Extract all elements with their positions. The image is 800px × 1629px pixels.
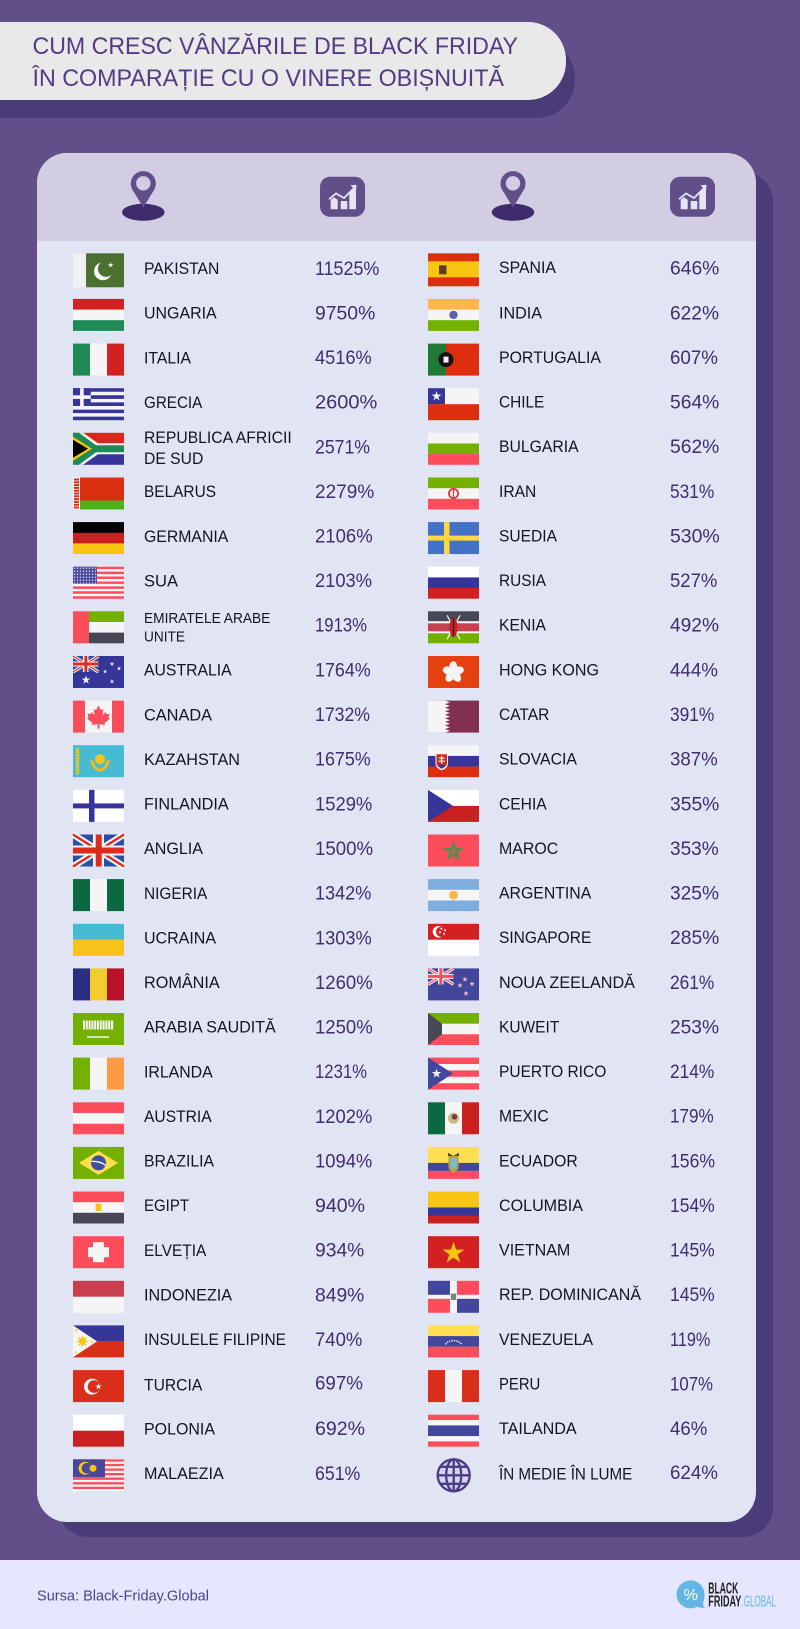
icon: flag Portugal — [428, 344, 479, 376]
icon: flag Morocco — [428, 834, 479, 866]
row: Turcia: TURCIA — [144, 1377, 202, 1395]
row: Slovacia: 387% — [670, 749, 718, 771]
icon: flag Thailand — [428, 1415, 479, 1447]
row: Suedia: 530% — [670, 525, 720, 547]
icon: flag Italy — [73, 344, 124, 376]
row: Bulgaria: 562% — [670, 436, 719, 458]
row: Polonia — [73, 1415, 365, 1447]
row: Kuweit: 253% — [670, 1016, 719, 1038]
icon: flag Mexico — [428, 1102, 479, 1134]
row: Brazilia: 1094% — [315, 1150, 372, 1172]
row: Turcia — [73, 1370, 363, 1402]
row: Egipt — [73, 1192, 365, 1224]
row: Irlanda: 1231% — [315, 1061, 367, 1083]
icon: flag Egypt — [73, 1192, 124, 1224]
icon: flag Romania — [73, 968, 124, 1000]
title banner: CUM CRESC VÂNZĂRILE DE BLACK FRIDAY — [32, 33, 518, 60]
row: Iran: IRAN — [499, 483, 536, 501]
row: India: INDIA — [499, 304, 542, 322]
row: Egipt: 940% — [315, 1195, 365, 1217]
row: Turcia: 697% — [315, 1372, 363, 1394]
row: Australia: 1764% — [315, 660, 371, 682]
row: Polonia: POLONIA — [144, 1420, 215, 1438]
row: Egipt: EGIPT — [144, 1197, 189, 1215]
row: Emiratele Arabe Unite: UNITE — [144, 629, 185, 645]
icon: flag Belarus — [73, 478, 124, 510]
row: Kenia: KENIA — [499, 617, 546, 635]
row: Emiratele Arabe Unite — [73, 611, 367, 646]
row: Columbia: 154% — [670, 1195, 715, 1217]
row: Bulgaria: BULGARIA — [499, 438, 579, 456]
row: Chile — [428, 388, 719, 420]
row: Malaezia — [73, 1459, 360, 1491]
row: Austria: AUSTRIA — [144, 1108, 212, 1126]
row: SUA: 2103% — [315, 570, 372, 592]
row: Puerto Rico: 214% — [670, 1061, 714, 1083]
icon: flag Slovakia — [428, 745, 479, 777]
row: Brazilia: BRAZILIA — [144, 1153, 214, 1171]
row: Nigeria: NIGERIA — [144, 885, 207, 903]
icon: flag South Africa — [73, 433, 124, 465]
icon: flag Austria — [73, 1102, 124, 1134]
row: Grecia: 2600% — [315, 392, 377, 414]
row: Grecia: GRECIA — [144, 394, 202, 412]
row: Indonezia: 849% — [315, 1284, 364, 1306]
row: Kuweit — [428, 1013, 719, 1045]
row: Iran — [428, 478, 714, 510]
row: Ecuador: 156% — [670, 1150, 715, 1172]
row: Insulele Filipine — [73, 1325, 362, 1357]
icon: globe — [438, 1459, 470, 1491]
row: Finlandia — [73, 790, 372, 822]
icon: flag Germany — [73, 522, 124, 554]
row: Noua Zeelandă: NOUA ZEELANDĂ — [499, 973, 635, 992]
row: Maroc: MAROC — [499, 840, 559, 858]
row: Ecuador: ECUADOR — [499, 1152, 578, 1170]
row: Germania: GERMANIA — [144, 528, 228, 546]
icon: location pin right — [492, 171, 534, 221]
icon: location pin left — [122, 171, 165, 221]
row: Republica Africii de Sud: DE SUD — [144, 450, 203, 468]
row: Kazahstan — [73, 745, 371, 777]
row: Rusia: 527% — [670, 570, 717, 592]
row: Cehia: 355% — [670, 793, 719, 815]
icon: flag Canada — [73, 701, 124, 733]
row: Suedia: SUEDIA — [499, 527, 557, 545]
row: Portugalia: 607% — [670, 347, 718, 369]
row: Argentina: ARGENTINA — [499, 884, 591, 902]
row: Rep. Dominicană — [428, 1281, 715, 1313]
row: Spania — [428, 253, 719, 286]
source text: Sursa: Black-Friday.Global — [37, 1588, 209, 1605]
icon: flag Hungary — [73, 299, 124, 331]
row: Mexic: 179% — [670, 1106, 714, 1128]
row: Vietnam — [428, 1236, 715, 1268]
row: Rusia — [428, 567, 717, 599]
row: Noua Zeelandă — [428, 968, 714, 1000]
row: Irlanda — [73, 1058, 367, 1090]
row: În medie în lume: ÎN MEDIE ÎN LUME — [498, 1465, 632, 1484]
icon: flag Ukraine — [73, 924, 124, 956]
icon: flag Brazil — [73, 1147, 124, 1179]
icon: flag Peru — [428, 1370, 479, 1402]
row: Canada — [73, 701, 370, 733]
row: Canada: 1732% — [315, 704, 370, 726]
row: Nigeria — [73, 879, 371, 911]
row: Bulgaria — [428, 433, 719, 465]
row: Hong Kong: HONG KONG — [499, 661, 599, 679]
row: Puerto Rico: PUERTO RICO — [499, 1063, 606, 1081]
row: Italia: ITALIA — [144, 349, 191, 367]
row: Tailanda: 46% — [670, 1418, 707, 1440]
icon: flag Australia — [73, 656, 124, 688]
row: Venezuela: 119% — [670, 1329, 710, 1351]
row: Indonezia — [73, 1281, 364, 1313]
row: Malaezia: 651% — [315, 1463, 360, 1485]
row: Austria: 1202% — [315, 1106, 372, 1128]
icon: flag Kazakhstan — [73, 745, 124, 777]
row: Vietnam: VIETNAM — [499, 1242, 570, 1260]
row: România: ROMÂNIA — [144, 973, 220, 992]
row: Belarus: 2279% — [315, 481, 374, 503]
row: Australia — [73, 656, 371, 688]
row: Arabia Saudită — [73, 1013, 373, 1045]
row: Slovacia — [428, 745, 718, 777]
row: Belarus — [73, 478, 374, 510]
icon: flag Hong Kong — [428, 656, 479, 688]
row: Republica Africii de Sud — [73, 429, 370, 468]
icon: flag Venezuela — [428, 1325, 479, 1357]
icon: flag Sweden — [428, 522, 479, 554]
row: Anglia — [73, 834, 373, 866]
row: Singapore: SINGAPORE — [499, 929, 591, 947]
row: Venezuela: VENEZUELA — [499, 1331, 593, 1349]
row: Insulele Filipine: 740% — [315, 1329, 362, 1351]
row: Ecuador — [428, 1147, 715, 1179]
row: Cehia: CEHIA — [499, 795, 547, 813]
row: Chile: CHILE — [499, 394, 544, 412]
icon: growth chart left — [320, 177, 365, 217]
footer — [0, 1560, 800, 1629]
row: Noua Zeelandă: 261% — [670, 972, 714, 994]
icon: flag Indonesia — [73, 1281, 124, 1313]
icon: flag Puerto Rico — [428, 1058, 479, 1090]
row: Pakistan — [73, 253, 379, 287]
row: SUA: SUA — [144, 572, 178, 590]
icon: flag Argentina — [428, 879, 479, 911]
row: Spania: 646% — [670, 257, 719, 279]
icon: flag Kuwait — [428, 1013, 479, 1045]
row: Elveția: 934% — [315, 1240, 364, 1262]
row: Kazahstan: KAZAHSTAN — [144, 751, 240, 769]
row: Grecia — [73, 388, 377, 420]
row: Venezuela — [428, 1325, 710, 1357]
row: România — [73, 968, 373, 1000]
icon: flag Finland — [73, 790, 124, 822]
icon: flag Philippines — [73, 1325, 124, 1357]
icon: flag Saudi Arabia — [73, 1013, 124, 1045]
row: Kazahstan: 1675% — [315, 749, 371, 771]
panel: country table — [37, 153, 773, 1537]
row: Malaezia: MALAEZIA — [144, 1465, 224, 1483]
icon: flag Dominican Republic — [428, 1281, 479, 1313]
row: Nigeria: 1342% — [315, 883, 371, 905]
icon: flag Poland — [73, 1415, 124, 1447]
row: Rep. Dominicană: 145% — [670, 1284, 715, 1306]
row: SUA — [73, 567, 372, 599]
row: Tailanda: TAILANDA — [499, 1420, 577, 1438]
row: Ungaria — [73, 299, 375, 331]
row: Chile: 564% — [670, 392, 719, 414]
row: Peru — [428, 1370, 713, 1402]
row: Kenia: 492% — [670, 615, 719, 637]
icon: flag Russia — [428, 567, 479, 599]
row: Argentina — [428, 879, 719, 911]
row: Elveția: ELVEȚIA — [144, 1242, 206, 1260]
row: Germania — [73, 522, 373, 554]
row: Italia: 4516% — [315, 347, 372, 369]
icon: flag New Zealand — [428, 968, 479, 1000]
row: Puerto Rico — [428, 1058, 714, 1090]
row: Insulele Filipine: INSULELE FILIPINE — [144, 1331, 286, 1349]
icon: flag Colombia — [428, 1192, 479, 1224]
icon: flag India — [428, 299, 479, 331]
icon: flag Iran — [428, 478, 479, 510]
title banner: ÎN COMPARAȚIE CU O VINERE OBIȘNUITĂ — [32, 65, 504, 92]
icon: flag Kenya — [428, 611, 479, 643]
row: Portugalia — [428, 344, 718, 376]
row: Brazilia — [73, 1147, 372, 1179]
row: Kenia — [428, 611, 719, 643]
row: Australia: AUSTRALIA — [144, 662, 232, 680]
row: Finlandia: 1529% — [315, 793, 372, 815]
row: Belarus: BELARUS — [144, 483, 216, 501]
row: Arabia Saudită: ARABIA SAUDITĂ — [144, 1018, 276, 1037]
row: Anglia: ANGLIA — [144, 840, 203, 858]
row: Catar: 391% — [670, 704, 714, 726]
icon: flag Turkey — [73, 1370, 124, 1402]
icon: growth chart right — [670, 177, 715, 217]
row: Singapore: 285% — [670, 927, 719, 949]
row: India — [428, 299, 719, 331]
row: Columbia: COLUMBIA — [499, 1197, 583, 1215]
row: Emiratele Arabe Unite: 1913% — [315, 615, 367, 637]
row: Austria — [73, 1102, 372, 1134]
row: Hong Kong: 444% — [670, 659, 718, 681]
logo: Black Friday Global: % — [684, 1587, 698, 1604]
row: Mexic — [428, 1102, 714, 1134]
row: Arabia Saudită: 1250% — [315, 1016, 373, 1038]
row: Maroc — [428, 834, 719, 866]
row: Hong Kong — [428, 656, 718, 688]
row: Elveția — [73, 1236, 364, 1268]
row: Pakistan: 11525% — [315, 258, 379, 280]
row: Peru: PERU — [499, 1375, 540, 1393]
row: România: 1260% — [315, 972, 373, 994]
icon: flag Singapore — [428, 924, 479, 956]
row: Vietnam: 145% — [670, 1240, 715, 1262]
row: Republica Africii de Sud: 2571% — [315, 436, 370, 458]
logo: Black Friday Global — [677, 1580, 776, 1611]
row: Singapore — [428, 924, 719, 956]
row: În medie în lume: 624% — [670, 1462, 718, 1484]
icon: flag UK — [73, 834, 124, 866]
row: Kuweit: KUWEIT — [499, 1018, 559, 1036]
row: Suedia — [428, 522, 720, 554]
row: Republica Africii de Sud: REPUBLICA AFRICII — [144, 429, 292, 447]
icon: flag Spain — [428, 253, 479, 286]
row: Ucraina: UCRAINA — [144, 929, 216, 947]
row: Ungaria: 9750% — [315, 302, 375, 324]
icon: flag Bulgaria — [428, 433, 479, 465]
row: Argentina: 325% — [670, 882, 719, 904]
row: Spania: SPANIA — [499, 259, 556, 277]
icon: flag USA — [73, 567, 124, 599]
icon: flag Chile — [428, 388, 479, 420]
row: Germania: 2106% — [315, 526, 373, 548]
row: Mexic: MEXIC — [499, 1108, 549, 1126]
row: Finlandia: FINLANDIA — [144, 796, 229, 814]
row: Columbia — [428, 1192, 715, 1224]
row: India: 622% — [670, 302, 719, 324]
icon: flag Ireland — [73, 1058, 124, 1090]
row: Iran: 531% — [670, 481, 714, 503]
row: Ungaria: UNGARIA — [144, 305, 217, 323]
row: Ucraina: 1303% — [315, 927, 372, 949]
row: Peru: 107% — [670, 1373, 713, 1395]
logo: Black Friday Global: BLACK — [708, 1580, 739, 1598]
row: În medie în lume — [438, 1459, 718, 1491]
row: Portugalia: PORTUGALIA — [499, 349, 601, 367]
row: Italia — [73, 344, 372, 376]
icon: flag Greece — [73, 388, 124, 420]
icon: flag Switzerland — [73, 1236, 124, 1268]
row: Rep. Dominicană: REP. DOMINICANĂ — [499, 1285, 641, 1304]
row: Indonezia: INDONEZIA — [144, 1287, 232, 1305]
logo: Black Friday Global: FRIDAY — [708, 1594, 742, 1611]
row: Ucraina — [73, 924, 372, 956]
row: Slovacia: SLOVACIA — [499, 751, 577, 769]
icon: flag Ecuador — [428, 1147, 479, 1179]
icon: flag Nigeria — [73, 879, 124, 911]
icon: flag Malaysia — [73, 1459, 124, 1491]
row: Catar: CATAR — [499, 706, 549, 724]
icon: flag UAE — [73, 611, 124, 643]
row: Emiratele Arabe Unite: EMIRATELE ARABE — [144, 611, 270, 627]
row: Polonia: 692% — [315, 1418, 365, 1440]
icon: flag Qatar — [428, 701, 479, 733]
row: Irlanda: IRLANDA — [144, 1063, 213, 1081]
row: Tailanda — [428, 1415, 707, 1447]
icon: flag Vietnam — [428, 1236, 479, 1268]
title banner — [0, 22, 575, 118]
icon: flag Pakistan — [73, 253, 124, 287]
icon: flag Czech Republic — [428, 790, 479, 822]
row: Rusia: RUSIA — [499, 572, 546, 590]
row: Maroc: 353% — [670, 838, 719, 860]
row: Anglia: 1500% — [315, 838, 373, 860]
row: Pakistan: PAKISTAN — [144, 260, 219, 278]
row: Cehia — [428, 790, 719, 822]
row: Canada: CANADA — [144, 706, 212, 724]
row: Catar — [428, 701, 714, 733]
